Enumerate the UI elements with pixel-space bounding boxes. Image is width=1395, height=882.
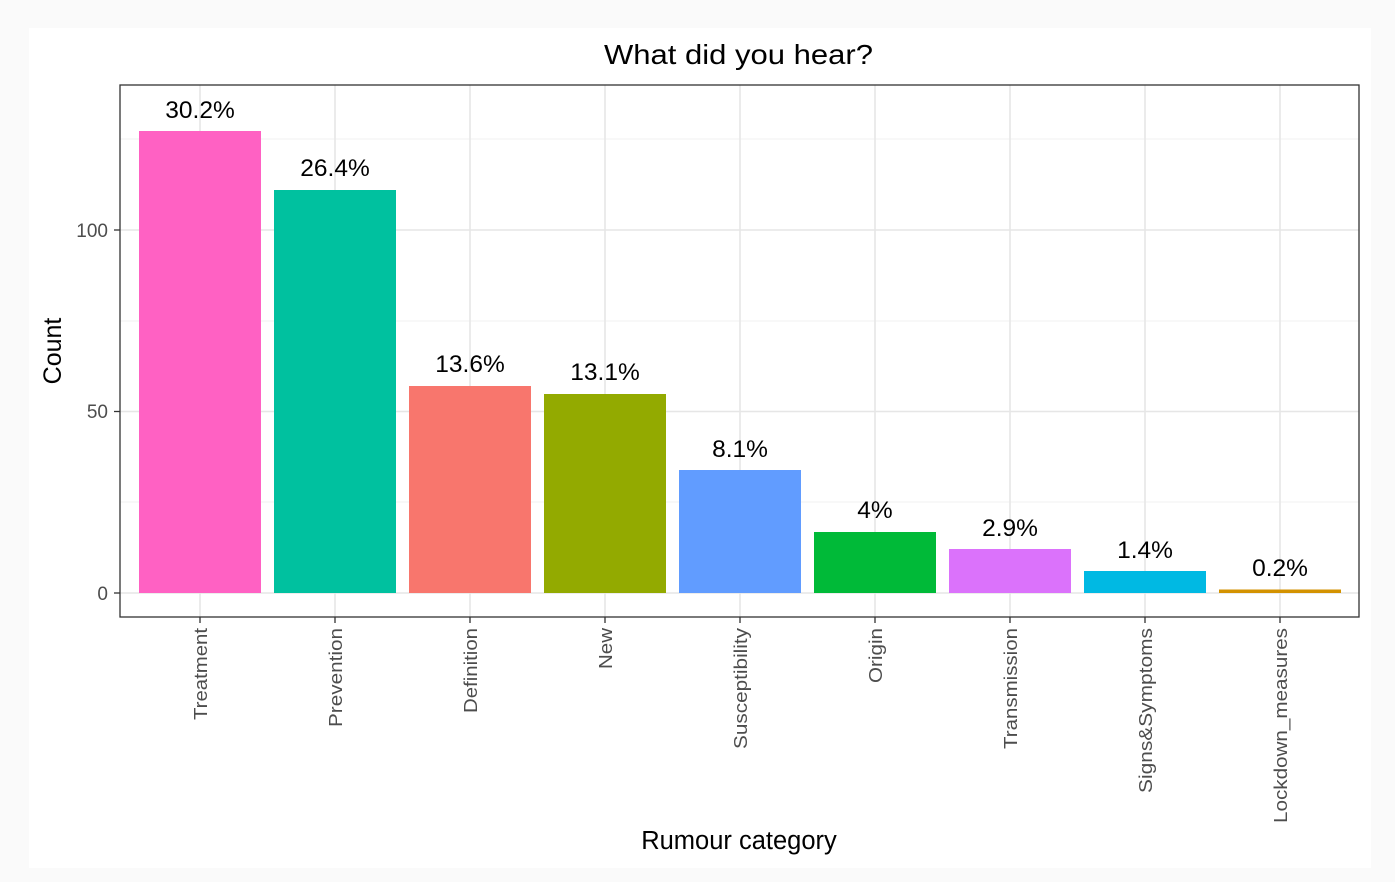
x axis title: Rumour category bbox=[641, 827, 837, 855]
x axis ticks and category labels: Treatment bbox=[191, 628, 211, 720]
plot area bbox=[120, 85, 1359, 617]
x axis ticks and category labels: Definition bbox=[461, 628, 481, 713]
y axis ticks and labels: 0 bbox=[97, 584, 108, 605]
y axis ticks and labels: 50 bbox=[87, 402, 108, 423]
bar value labels: 1.4% bbox=[1117, 537, 1173, 564]
x axis ticks and category labels: Origin bbox=[866, 628, 886, 683]
x axis ticks and category labels: Signs&Symptoms bbox=[1136, 628, 1156, 793]
plot border bbox=[120, 85, 1359, 617]
bar value labels bbox=[165, 97, 1308, 582]
bar value labels: 8.1% bbox=[712, 436, 768, 463]
x axis ticks and category labels: Lockdown_measures bbox=[1271, 628, 1292, 823]
bar value labels: 13.6% bbox=[435, 351, 505, 378]
bar value labels: 0.2% bbox=[1252, 555, 1308, 582]
x axis ticks and category labels: Prevention bbox=[326, 628, 346, 727]
x axis ticks and category labels: Susceptibility bbox=[731, 628, 751, 749]
y axis ticks and labels bbox=[76, 221, 120, 605]
bar value labels: 4% bbox=[857, 497, 893, 524]
y axis title: Count bbox=[39, 318, 67, 384]
x axis ticks and category labels: Transmission bbox=[1001, 628, 1021, 749]
x axis ticks and category labels bbox=[191, 617, 1292, 823]
bar value labels: 26.4% bbox=[300, 155, 370, 182]
bar chart bbox=[139, 131, 1341, 593]
bar value labels: 2.9% bbox=[982, 515, 1038, 542]
bar value labels: 13.1% bbox=[570, 359, 640, 386]
title: What did you hear? bbox=[604, 39, 873, 70]
y axis ticks and labels: 100 bbox=[76, 221, 108, 242]
bar value labels: 30.2% bbox=[165, 97, 235, 124]
x axis ticks and category labels: New bbox=[596, 627, 616, 669]
